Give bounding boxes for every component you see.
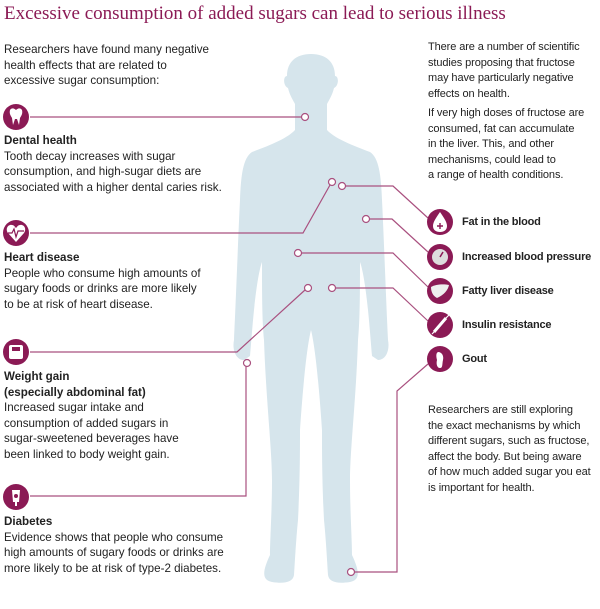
closing text: Researchers are still exploring xyxy=(428,404,573,416)
icon: foot xyxy=(427,346,453,372)
icon: drop xyxy=(427,209,453,235)
diabetes: more likely to be at risk of type-2 diabetes. xyxy=(4,562,221,574)
right intro xyxy=(428,41,580,100)
heart disease: People who consume high amounts of xyxy=(4,266,201,280)
connector: gout xyxy=(348,364,428,576)
icon: gauge xyxy=(427,244,453,270)
right intro: studies proposing that fructose xyxy=(428,56,575,68)
connector: dental xyxy=(30,114,308,120)
dental health: consumption, and high-sugar diets are xyxy=(4,165,201,178)
connector: fatty liver xyxy=(294,250,428,287)
dental health: Tooth decay increases with sugar xyxy=(4,150,175,162)
connector: heart xyxy=(30,178,336,233)
title: Excessive consumption of added sugars can lead to serious illness xyxy=(4,3,506,24)
icon: diabetes xyxy=(3,484,29,510)
text: Fatty liver disease xyxy=(462,285,554,297)
silhouette xyxy=(233,54,389,583)
text: Gout xyxy=(462,353,487,365)
labels: Fat in the blood xyxy=(462,216,541,228)
weight gain xyxy=(4,370,179,460)
icon: syringe xyxy=(427,312,453,338)
fructose text: If very high doses of fructose are xyxy=(428,107,584,119)
text: Increased blood pressure xyxy=(462,251,591,263)
closing text: the exact mechanisms by which xyxy=(428,420,580,432)
heart disease xyxy=(4,251,201,310)
connector: insulin xyxy=(328,284,428,321)
connector: blood pressure xyxy=(362,216,428,252)
icon: tooth xyxy=(3,104,29,130)
right intro: may have particularly negative xyxy=(428,72,574,84)
icon: scale xyxy=(3,339,29,365)
intro text: excessive sugar consumption: xyxy=(4,74,159,87)
text: Insulin resistance xyxy=(462,319,551,331)
weight gain: Weight gain xyxy=(4,370,69,383)
weight gain: (especially abdominal fat) xyxy=(4,386,146,398)
intro text xyxy=(4,43,209,87)
weight gain: consumption of added sugars in xyxy=(4,416,168,430)
closing text: affect the body. But being aware xyxy=(428,450,582,462)
fructose text xyxy=(428,107,584,181)
closing text: of how much added sugar you eat xyxy=(428,466,591,478)
dental health xyxy=(4,134,222,194)
closing text xyxy=(428,404,591,494)
heart disease: sugary foods or drinks are more likely xyxy=(4,282,197,295)
weight gain: Increased sugar intake and xyxy=(4,401,144,414)
intro text: Researchers have found many negative xyxy=(4,43,209,56)
closing text: different sugars, such as fructose, xyxy=(428,435,589,447)
icon: liver xyxy=(427,278,453,304)
diabetes: Evidence shows that people who consume xyxy=(4,530,223,544)
connector: weight xyxy=(30,284,312,352)
fructose text: in the liver. This, and other xyxy=(428,138,554,150)
heart disease: Heart disease xyxy=(4,251,79,264)
weight gain: been linked to body weight gain. xyxy=(4,448,170,460)
intro text: health effects that are related to xyxy=(4,58,167,72)
fructose text: consumed, fat can accumulate xyxy=(428,122,574,134)
dental health: associated with a higher dental caries risk. xyxy=(4,180,222,194)
diabetes xyxy=(4,515,224,574)
fructose text: mechanisms, could lead to xyxy=(428,154,556,166)
dental health: Dental health xyxy=(4,134,77,147)
fructose text: a range of health conditions. xyxy=(428,169,563,181)
icon: heart xyxy=(3,220,29,246)
right intro: effects on health. xyxy=(428,88,510,100)
closing text: is important for health. xyxy=(428,482,534,494)
heart disease: to be at risk of heart disease. xyxy=(4,298,153,310)
weight gain: sugar-sweetened beverages have xyxy=(4,432,179,445)
connector: diabetes xyxy=(30,360,250,496)
diabetes: high amounts of sugary foods or drinks are xyxy=(4,546,224,559)
connector: fat in blood xyxy=(338,182,428,218)
diabetes: Diabetes xyxy=(4,515,52,528)
right intro: There are a number of scientific xyxy=(428,41,579,53)
